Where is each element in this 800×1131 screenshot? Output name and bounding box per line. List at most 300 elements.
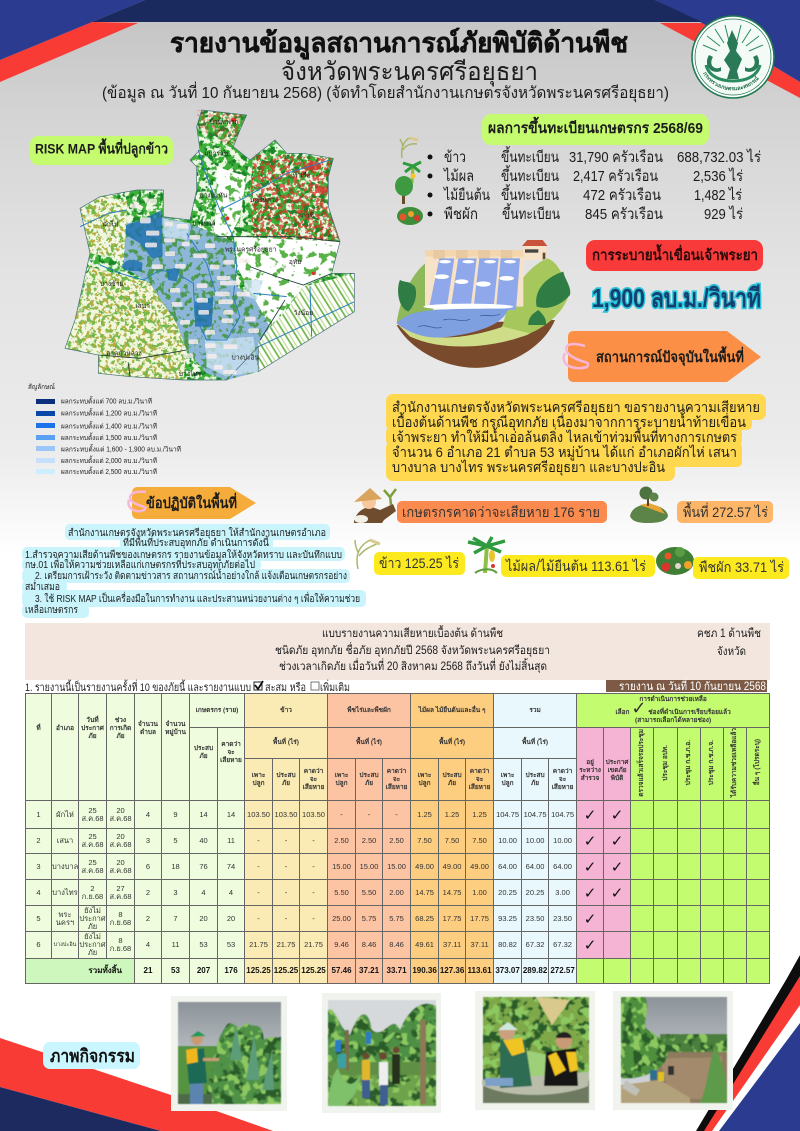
table: preliminary crop damage report: จะ <box>310 776 317 783</box>
table: preliminary crop damage report: จะ <box>559 776 566 783</box>
dam discharge heading: การระบายน้ำเขื่อนเจ้าพระยา <box>592 244 758 264</box>
table: preliminary crop damage report: ส.ค.68 <box>109 814 132 823</box>
table: preliminary crop damage report: สำรวจ <box>581 775 599 782</box>
table: preliminary crop damage report: คาดว่า <box>221 741 241 748</box>
table: preliminary crop damage report: เสนา <box>57 836 73 845</box>
table: preliminary crop damage report: คาดว่า <box>470 768 489 775</box>
table: preliminary crop damage report: - <box>285 836 287 845</box>
report type line: สะสม หรือ <box>265 681 306 694</box>
table: preliminary crop damage report: เสียหาย <box>303 784 324 791</box>
table: preliminary crop damage report: ก.ย.68 <box>110 918 131 927</box>
table: preliminary crop damage report: 176 <box>224 966 238 975</box>
table: preliminary crop damage report: 2 <box>90 884 95 893</box>
table: preliminary crop damage report: 2.50 <box>362 836 376 845</box>
report form header: จังหวัด <box>717 646 746 658</box>
registration list: ขึ้นทะเบียน <box>501 146 559 166</box>
map legend: ผลกระทบตั้งแต่ 1,200 ลบ.ม./วินาที <box>61 406 157 418</box>
table: preliminary crop damage report: 18 <box>171 862 180 871</box>
table: preliminary crop damage report: - <box>285 888 287 897</box>
table: preliminary crop damage report: ประชุม อปท. <box>662 745 669 780</box>
table: preliminary crop damage report: 190.36 <box>412 966 437 975</box>
table: preliminary crop damage report: 103.50 <box>302 810 325 819</box>
table: preliminary crop damage report: วันที่ <box>86 717 99 724</box>
table: preliminary crop damage report: เพาะ <box>418 772 431 779</box>
province outline <box>65 110 354 380</box>
table: preliminary crop damage report: 4 <box>146 810 150 819</box>
table: preliminary crop damage report: 2.00 <box>389 888 404 897</box>
table: preliminary crop damage report: เสียหาย <box>220 757 242 764</box>
table: preliminary crop damage report: อื่น ๆ (โปรดระบุ) <box>754 739 761 786</box>
table: preliminary crop damage report: 37.11 <box>443 940 461 949</box>
table: preliminary crop damage report: 4 <box>201 888 206 897</box>
table: preliminary crop damage report: 20 <box>227 914 235 923</box>
table: preliminary crop damage report: 4 <box>229 888 233 897</box>
registration list: 1,482 ไร่ <box>694 186 742 204</box>
table: preliminary crop damage report: 53 <box>227 940 235 949</box>
icon: tree small <box>395 176 413 204</box>
icon: land with trees <box>630 486 668 523</box>
table: preliminary crop damage report: 373.07 <box>495 966 520 975</box>
table: preliminary crop damage report: ไม้ผล ไม้ยืนต้นและอื่น ๆ <box>419 706 486 714</box>
district names: วังน้อย <box>294 309 313 317</box>
table: preliminary crop damage report: ปลูก <box>419 780 431 787</box>
table: preliminary crop damage report: 2.50 <box>334 836 349 845</box>
table: preliminary crop damage report: 20.25 <box>498 888 517 897</box>
table: preliminary crop damage report: จะ <box>393 776 400 783</box>
table: preliminary crop damage report: 9.46 <box>334 940 349 949</box>
footer decoration left <box>0 1038 273 1131</box>
photo: flooded field <box>613 991 733 1110</box>
table: preliminary crop damage report: 67.32 <box>553 940 572 949</box>
icon: banana plant <box>468 537 505 573</box>
situation text block: เบื้องต้นด้านพืช กรณีอุทกภัย เนื่องมาจากการระบายน้ำท้ายเขื่อน <box>392 412 746 431</box>
table: preliminary crop damage report: ✓ <box>584 936 596 954</box>
table: preliminary crop damage report: ก.ย.68 <box>82 892 103 901</box>
table: preliminary crop damage report: อยู่ <box>586 759 594 766</box>
field actions text block: ที่มีพื้นที่ประสบอุทกภัย ดำเนินการดังนี้ <box>123 535 270 549</box>
map legend: ผลกระทบตั้งแต่ 1,600 - 1,900 ลบ.ม./วินาที <box>61 442 181 454</box>
report type line <box>25 679 350 694</box>
table: preliminary crop damage report: ประชุม ก.ช.ภ.อ. <box>685 740 692 785</box>
registration list: ขึ้นทะเบียน <box>501 184 559 204</box>
table: preliminary crop damage report: ภัย <box>88 922 97 931</box>
table: preliminary crop damage report: - <box>312 888 315 897</box>
total area <box>677 501 773 523</box>
vegetable area: พืชผัก 33.71 ไร่ <box>699 559 784 575</box>
field actions arrow: ข้อปฏิบัติในพื้นที่ <box>146 492 237 512</box>
field actions text block: 3. ใช้ RISK MAP เป็นเครื่องมือในการทำงาน และประสานหน่วยงานต่าง ๆ เพื่อให้ความช่วย <box>35 591 360 605</box>
table: preliminary crop damage report: ประสบ <box>194 745 213 752</box>
table: preliminary crop damage report: 8.46 <box>389 940 404 949</box>
table: preliminary crop damage report: คาดว่า <box>387 768 406 775</box>
table: preliminary crop damage report: 8.46 <box>362 940 376 949</box>
table: preliminary crop damage report: 272.57 <box>550 966 575 975</box>
table: preliminary crop damage report: 21.75 <box>304 940 323 949</box>
registration list: 472 ครัวเรือน <box>583 187 661 204</box>
registration list: 2,536 ไร่ <box>693 167 743 185</box>
table: preliminary crop damage report: 14 <box>227 810 235 819</box>
district names: เสนา <box>135 303 150 310</box>
table: preliminary crop damage report: 5 <box>173 836 178 845</box>
table: preliminary crop damage report: ส.ค.68 <box>81 840 104 849</box>
table: preliminary crop damage report: บางไทร <box>52 888 78 897</box>
table: preliminary crop damage report: 93.25 <box>498 914 517 923</box>
table: preliminary crop damage report: 3 <box>173 888 178 897</box>
table: preliminary crop damage report: พื้นที่ (ไร่) <box>356 739 382 746</box>
table: preliminary crop damage report: 1.25 <box>417 810 432 819</box>
table: preliminary crop damage report: - <box>312 836 315 845</box>
icon: vegetables <box>656 547 694 575</box>
table: preliminary crop damage report: 21 <box>144 966 152 975</box>
table: preliminary crop damage report: 57.46 <box>332 966 352 975</box>
table: preliminary crop damage report: การเกิด <box>110 725 131 732</box>
dam discharge heading <box>586 240 763 271</box>
table: preliminary crop damage report: 15.00 <box>360 862 378 871</box>
table: preliminary crop damage report: 23.50 <box>526 914 544 923</box>
table: preliminary crop damage report: จำนวน <box>138 721 158 728</box>
table: preliminary crop damage report: 7.50 <box>472 836 487 845</box>
table: preliminary crop damage report: ประกาศ <box>79 940 106 949</box>
table: preliminary crop damage report: 1.00 <box>472 888 487 897</box>
table: preliminary crop damage report: ส.ค.68 <box>109 840 132 849</box>
table: preliminary crop damage report: 1 <box>36 810 41 819</box>
table: preliminary crop damage report: ระหว่าง <box>579 767 601 774</box>
table: preliminary crop damage report: - <box>312 914 315 923</box>
registration list: พืชผัก <box>444 206 478 223</box>
table: preliminary crop damage report: 11 <box>227 836 235 845</box>
registration list: ขึ้นทะเบียน <box>501 165 559 185</box>
table: preliminary crop damage report: 2 <box>36 836 41 845</box>
vegetable area <box>693 557 789 579</box>
table: preliminary crop damage report: การดำเนินการช่วยเหลือ <box>639 696 707 703</box>
table: preliminary crop damage report: พืชไร่และพืชผัก <box>347 706 391 714</box>
subtitle: จังหวัดพระนครศรีอยุธยา <box>281 58 538 87</box>
table: preliminary crop damage report: ✓ <box>584 858 596 876</box>
table: preliminary crop damage report: 5.50 <box>334 888 349 897</box>
table: preliminary crop damage report: ภัย <box>282 780 290 787</box>
photo: officers in boat <box>475 991 595 1110</box>
report date bar: รายงาน ณ วันที่ 10 กันยายน 2568 <box>619 678 766 693</box>
table: preliminary crop damage report: 125.25 <box>246 966 271 975</box>
table: preliminary crop damage report: พิบัติ <box>611 775 623 782</box>
table: preliminary crop damage report: 5 <box>36 914 41 923</box>
table: preliminary crop damage report: ผักไห่ <box>56 810 74 819</box>
map legend: ผลกระทบตั้งแต่ 2,000 ลบ.ม./วินาที <box>61 454 157 465</box>
table: preliminary crop damage report: นครฯ <box>56 918 74 927</box>
table: preliminary crop damage report: พื้นที่ (ไร่) <box>273 739 299 746</box>
table: preliminary crop damage report: 6 <box>36 940 41 949</box>
current situation arrow: สถานการณ์ปัจจุบันในพื้นที่ <box>596 346 744 366</box>
pale blue zones <box>163 218 263 377</box>
map legend <box>28 383 181 476</box>
table: preliminary crop damage report: 53 <box>171 966 180 975</box>
district names: ลาดบัวหลวง <box>106 349 142 357</box>
table: preliminary crop damage report: 1.25 <box>472 810 487 819</box>
risk map label <box>30 136 173 165</box>
table: preliminary crop damage report: ส.ค.68 <box>109 866 132 875</box>
table: preliminary crop damage report: 8 <box>118 910 123 919</box>
table: preliminary crop damage report: 23.50 <box>553 914 572 923</box>
table: preliminary crop damage report: ✓ <box>611 884 623 902</box>
district names: บางปะอิน <box>232 354 260 362</box>
title: รายงานข้อมูลสถานการณ์ภัยพิบัติด้านพืช <box>170 27 628 60</box>
table: preliminary crop damage report: ประกาศ <box>606 759 628 766</box>
table: preliminary crop damage report: หมู่บ้าน <box>165 729 186 736</box>
icon: banana plant small <box>403 162 421 183</box>
registration list: 2,417 ครัวเรือน <box>573 168 658 185</box>
activities label: ภาพกิจกรรม <box>50 1046 135 1066</box>
table: preliminary crop damage report: ✓ <box>584 832 596 850</box>
table: preliminary crop damage report: - <box>395 810 398 819</box>
table: preliminary crop damage report: 20 <box>116 858 125 867</box>
table: preliminary crop damage report: 103.50 <box>275 810 297 819</box>
table: preliminary crop damage report: 7.50 <box>445 836 459 845</box>
table: preliminary crop damage report: ตรวจแล้วเสร็จรอประชุม <box>638 729 645 796</box>
field actions text block: กษ.01 เพื่อให้ความช่วยเหลือแก่เกษตรกรที่ประสบอุทกภัยต่อไป <box>25 557 255 571</box>
table: preliminary crop damage report: 49.00 <box>443 862 461 871</box>
table: preliminary crop damage report: - <box>285 862 287 871</box>
table: preliminary crop damage report: ก.ย.68 <box>110 944 131 953</box>
map legend: ผลกระทบตั้งแต่ 1,500 ลบ.ม./วินาที <box>61 431 157 442</box>
table: preliminary crop damage report: 113.61 <box>468 966 492 975</box>
field actions text block: เหลือเกษตรกร <box>25 604 79 616</box>
table: preliminary crop damage report: 64.00 <box>498 862 517 871</box>
fruit and perennial area: ไม้ผล/ไม้ยืนต้น 113.61 ไร่ <box>505 558 646 574</box>
table: preliminary crop damage report: ประสบ <box>359 772 379 779</box>
table: preliminary crop damage report: ✓ <box>611 858 623 876</box>
table: preliminary crop damage report: บางบาล <box>52 862 78 871</box>
report form header: ชนิดภัย อุทกภัย ชื่อภัย อุทกภัยปี 2568 จังหวัดพระนครศรีอยุธยา <box>275 642 550 657</box>
table: preliminary crop damage report: 8 <box>118 936 123 945</box>
rice area <box>374 552 465 575</box>
district names: ผักไห่ <box>103 221 119 229</box>
district names: บางบาล <box>192 220 216 227</box>
table: preliminary crop damage report: 64.00 <box>553 862 572 871</box>
table: preliminary crop damage report: 25.00 <box>332 914 351 923</box>
registration heading: ผลการขึ้นทะเบียนเกษตรกร 2568/69 <box>488 116 703 137</box>
table: preliminary crop damage report: 14.75 <box>415 888 434 897</box>
table: preliminary crop damage report: ส.ค.68 <box>109 892 132 901</box>
registration list: ขึ้นทะเบียน <box>502 203 560 223</box>
table: preliminary crop damage report: ประกาศ <box>81 725 104 732</box>
table: preliminary crop damage report: 15.00 <box>332 862 351 871</box>
current situation arrow <box>564 331 761 382</box>
table: preliminary crop damage report: 10.00 <box>498 836 517 845</box>
table: preliminary crop damage report: เพาะ <box>335 772 348 779</box>
dam discharge value: 1,900 ลบ.ม./วินาที <box>592 283 761 313</box>
table: preliminary crop damage report: 33.71 <box>387 966 407 975</box>
table: preliminary crop damage report: เสียหาย <box>552 784 573 791</box>
table: preliminary crop damage report: ภัย <box>199 753 208 760</box>
registration list: 929 ไร่ <box>704 205 743 223</box>
registration list: 31,790 ครัวเรือน <box>569 149 663 166</box>
table: preliminary crop damage report: เกษตรกร (ราย) <box>196 706 238 714</box>
registration list: 845 ครัวเรือน <box>585 206 663 223</box>
report form header: ช่วงเวลาเกิดภัย เมื่อวันที่ 20 สิงหาคม 2568 ถึงวันที่ ยังไม่สิ้นสุด <box>279 658 547 673</box>
table: preliminary crop damage report: 53 <box>199 940 208 949</box>
table: preliminary crop damage report: 49.61 <box>415 940 434 949</box>
table: preliminary crop damage report: 25 <box>88 858 97 867</box>
district names: มหาราช <box>204 150 229 157</box>
table: preliminary crop damage report: รวมทั้งสิ้น <box>88 966 122 975</box>
district names: บ้านแพรก <box>210 118 238 126</box>
table: preliminary crop damage report: 2 <box>146 914 150 923</box>
table: preliminary crop damage report: 68.25 <box>415 914 434 923</box>
field actions text block: 2. เตรียมการเฝ้าระวัง ติดตามข่าวสาร สถานการณ์น้ำอย่างใกล้ แจ้งเตือนเกษตรกรอย่าง <box>35 568 347 582</box>
table: preliminary crop damage report: 207 <box>197 966 210 975</box>
district names: ท่าเรือ <box>293 171 311 179</box>
icon: farmer <box>354 488 396 523</box>
table: preliminary crop damage report: อำเภอ <box>56 725 74 732</box>
table: preliminary crop damage report: 40 <box>199 836 208 845</box>
table: preliminary crop damage report: 127.36 <box>440 966 464 975</box>
district names: ภาชี <box>301 211 314 219</box>
table: preliminary crop damage report: ยังไม่ <box>84 932 101 941</box>
table: preliminary crop damage report: 76 <box>199 862 208 871</box>
district names: บางไทร <box>179 370 202 378</box>
table: preliminary crop damage report: 4 <box>36 888 41 897</box>
map land cover <box>65 110 354 380</box>
table: preliminary crop damage report: ✓ <box>584 884 596 902</box>
table: preliminary crop damage report: 25 <box>88 832 97 841</box>
table: preliminary crop damage report: - <box>257 888 260 897</box>
table: preliminary crop damage report: 4 <box>146 940 150 949</box>
table: preliminary crop damage report: 3.00 <box>555 888 570 897</box>
table: preliminary crop damage report: 21.75 <box>249 940 268 949</box>
logo: กระทรวงเกษตรและสหกรณ์ <box>703 72 759 90</box>
fruit and perennial area <box>501 555 655 577</box>
total area: พื้นที่ 272.57 ไร่ <box>683 502 768 520</box>
activities label <box>43 1042 140 1069</box>
table: preliminary crop damage report: ยังไม่ <box>84 906 101 915</box>
risk map label: RISK MAP พื้นที่ปลูกข้าว <box>35 138 168 158</box>
table: preliminary crop damage report: คาดว่า <box>553 768 572 775</box>
table: preliminary crop damage report: ตำบล <box>140 729 156 736</box>
district names: พระนครศรีอยุธยา <box>225 246 277 254</box>
table: preliminary crop damage report: - <box>257 862 260 871</box>
illustration: dam <box>397 240 570 368</box>
district names: นครหลวง <box>250 197 278 204</box>
table: preliminary crop damage report: ประสบ <box>525 772 545 779</box>
table: preliminary crop damage report: บางปะอิน <box>54 942 76 948</box>
table: preliminary crop damage report: คาดว่า <box>304 768 323 775</box>
table: preliminary crop damage report: 10.00 <box>553 836 572 845</box>
situation text block: เจ้าพระยา ทำให้มีน้ำเอ่อล้นตลิ่ง ไหลเข้าท่วมพื้นที่ทางการเกษตร <box>392 427 737 445</box>
table: preliminary crop damage report: ✓ <box>611 806 623 824</box>
registration heading <box>482 114 709 145</box>
table: preliminary crop damage report: - <box>257 836 260 845</box>
field actions text block: สม่ำเสมอ <box>25 579 60 593</box>
table: preliminary crop damage report: ส.ค.68 <box>81 866 104 875</box>
registration list: ข้าว <box>444 149 466 166</box>
table: preliminary crop damage report: 74 <box>227 862 235 871</box>
table: preliminary crop damage report: ที่ <box>36 725 41 732</box>
field actions text block: 1.สำรวจความเสียด้านพืชของเกษตรกร รายงานข้อมูลให้จังหวัดทราบ และบันทึกแบบ <box>25 549 342 561</box>
table: preliminary crop damage report: ประสบ <box>276 772 296 779</box>
table: preliminary crop damage report: 289.82 <box>523 966 547 975</box>
table: preliminary crop damage report: เขตภัย <box>608 767 627 774</box>
table: preliminary crop damage report: ช่วง <box>115 717 126 724</box>
district names: บางซ้าย <box>100 280 123 288</box>
photo: officer in corn field <box>171 996 287 1111</box>
report form header <box>25 623 770 680</box>
table: preliminary crop damage report: 2.50 <box>389 836 404 845</box>
situation text block: บางบาล บางไทร พระนครศรีอยุธยา และบางปะอิน <box>392 459 665 476</box>
table: preliminary crop damage report: พื้นที่ (ไร่) <box>439 739 465 746</box>
table: preliminary crop damage report: ภัย <box>88 948 97 957</box>
table: preliminary crop damage report: ปลูก <box>502 780 514 787</box>
field actions text block <box>22 524 366 618</box>
icon: rice stalk small <box>400 138 418 158</box>
table: preliminary crop damage report: 37.21 <box>359 966 379 975</box>
table: preliminary crop damage report: พื้นที่ (ไร่) <box>522 739 548 746</box>
table: preliminary crop damage report: - <box>340 810 343 819</box>
table: preliminary crop damage report: - <box>368 810 370 819</box>
table: preliminary crop damage report: 14 <box>199 810 208 819</box>
table: preliminary crop damage report: 5.75 <box>389 914 404 923</box>
header banner <box>0 0 800 98</box>
icon: rice <box>355 540 380 569</box>
table: preliminary crop damage report: 10.00 <box>526 836 544 845</box>
table: preliminary crop damage report: 25 <box>88 806 97 815</box>
table: preliminary crop damage report: 104.75 <box>496 810 519 819</box>
table: preliminary crop damage report: 9 <box>173 810 178 819</box>
report form header: แบบรายงานความเสียหายเบื้องต้น ด้านพืช <box>322 625 503 640</box>
field actions arrow <box>128 487 256 519</box>
table: preliminary crop damage report: จำนวน <box>166 721 186 728</box>
table: preliminary crop damage report: ข้าว <box>280 706 292 714</box>
table: preliminary crop damage report: 20 <box>116 806 125 815</box>
table: preliminary crop damage report: 64.00 <box>526 862 544 871</box>
report date bar <box>606 678 767 693</box>
table: preliminary crop damage report: ส.ค.68 <box>81 814 104 823</box>
table: preliminary crop damage report: ✓ <box>611 832 623 850</box>
table: preliminary crop damage report: พระ <box>58 910 72 919</box>
table: preliminary crop damage report: 67.32 <box>526 940 544 949</box>
table: preliminary crop damage report: 3 <box>36 862 41 871</box>
table: preliminary crop damage report: เพาะ <box>252 772 265 779</box>
rice area: ข้าว 125.25 ไร่ <box>379 555 459 571</box>
table: preliminary crop damage report: เพาะ <box>501 772 514 779</box>
table: preliminary crop damage report: 37.11 <box>470 940 489 949</box>
table: preliminary crop damage report: 14.75 <box>443 888 461 897</box>
table: preliminary crop damage report: - <box>257 914 260 923</box>
district names: บางปะหัน <box>199 191 228 199</box>
map legend: สัญลักษณ์ <box>28 383 55 391</box>
registration list: ไม้ผล <box>443 167 474 185</box>
table: preliminary crop damage report: 7.50 <box>417 836 432 845</box>
table: preliminary crop damage report: ประสบ <box>442 772 462 779</box>
table: preliminary crop damage report: - <box>312 862 315 871</box>
table: preliminary crop damage report: จะ <box>476 776 483 783</box>
map legend: ผลกระทบตั้งแต่ 700 ลบ.ม./วินาที <box>61 394 152 406</box>
table: preliminary crop damage report: 17.75 <box>443 914 461 923</box>
rivers and boundaries <box>80 150 354 347</box>
table: preliminary crop damage report: 125.25 <box>274 966 298 975</box>
table: preliminary crop damage report: 6 <box>146 862 150 871</box>
table: preliminary crop damage report: 125.25 <box>301 966 326 975</box>
table: preliminary crop damage report: 49.00 <box>470 862 489 871</box>
farmers affected <box>397 501 607 523</box>
table: preliminary crop damage report: ✓ <box>584 910 596 928</box>
table: preliminary crop damage report: ภัย <box>88 733 97 740</box>
table: preliminary crop damage report: 15.00 <box>387 862 406 871</box>
district names: อุทัย <box>289 258 301 266</box>
table: preliminary crop damage report: ภัย <box>116 733 125 740</box>
map legend: ผลกระทบตั้งแต่ 2,500 ลบ.ม./วินาที <box>61 465 157 476</box>
table: preliminary crop damage report: 20.25 <box>526 888 544 897</box>
situation text block: จำนวน 6 อำเภอ 21 ตำบล 53 หมู่บ้าน ได้แก่ อำเภอผักไห่ เสนา <box>392 444 737 461</box>
